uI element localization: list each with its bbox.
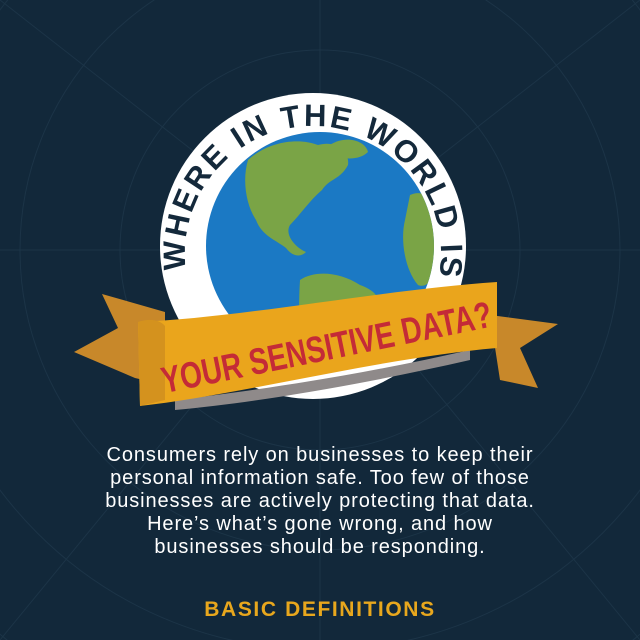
heading: basic definitions: BASIC DEFINITIONS bbox=[204, 598, 436, 621]
badge: globe with arc title: WHERE IN THE WORLD IS bbox=[163, 104, 462, 276]
intro text: businesses should be responding. bbox=[154, 536, 486, 558]
arc title bbox=[185, 126, 441, 270]
badge: globe with arc title bbox=[160, 93, 466, 399]
intro text bbox=[105, 444, 535, 558]
intro text: Here’s what’s gone wrong, and how bbox=[147, 513, 493, 535]
globe bbox=[206, 132, 434, 314]
ribbon tails bbox=[74, 294, 165, 385]
intro text: businesses are actively protecting that data. bbox=[105, 490, 535, 512]
intro text: Consumers rely on businesses to keep their bbox=[107, 444, 533, 466]
intro text: personal information safe. Too few of those bbox=[110, 467, 530, 489]
ribbon text: YOUR SENSITIVE DATA? bbox=[158, 294, 495, 401]
ribbon banner bbox=[74, 282, 558, 410]
